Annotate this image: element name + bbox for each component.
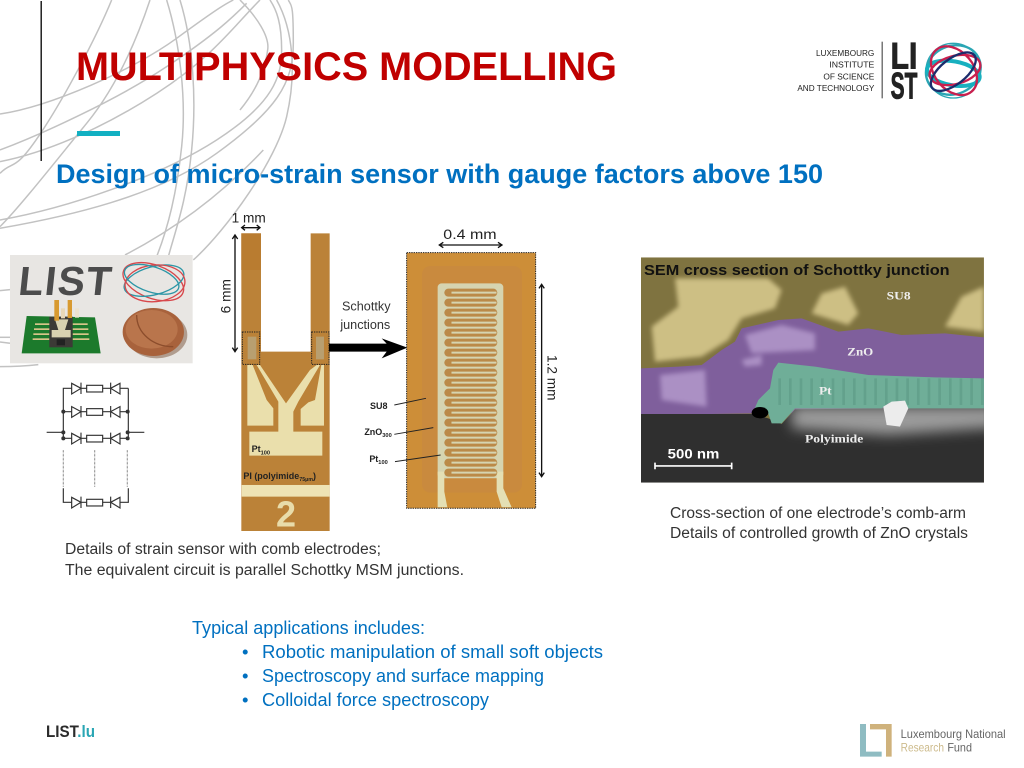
comb labels: 300 [382,433,392,439]
label: Schottky junctions: Schottky [342,299,391,313]
caption: SEM image: Cross-section of one electrode’s comb-arm [670,505,966,522]
left vertical rule [40,1,42,161]
footer logo: Luxembourg National Research Fund: Luxembourg National [901,728,1006,741]
typical applications list: Robotic manipulation of small soft objects [262,641,603,662]
title: MULTIPHYSICS MODELLING [76,45,617,89]
SEM cross section image: 500 nm [668,446,719,462]
footer logo: Luxembourg National Research Fund: Research [901,742,944,755]
SEM cross section image: Pt [819,383,832,397]
logo: Luxembourg Institute of Science and Technology: INSTITUTE [829,60,875,70]
dimension: 1 mm: 1 mm [232,211,266,226]
subtitle: Design of micro-strain sensor with gauge factors above 150 [56,159,823,189]
logo: Luxembourg Institute of Science and Technology: AND TECHNOLOGY [797,83,875,93]
SEM cross section image: SU8 [887,289,911,303]
typical applications list: • [242,641,248,662]
SEM cross section image [641,257,1008,483]
SEM cross section image: SEM cross section of Schottky junction [644,263,950,279]
typical applications list: • [242,665,248,686]
caption: strain sensor: Details of strain sensor with comb electrodes; [65,541,381,558]
dimension: 1.2 mm [539,284,559,477]
comb labels [364,398,441,466]
equivalent circuit diagram [47,383,144,508]
logo: Luxembourg Institute of Science and Technology: LI [891,35,917,77]
logo: Luxembourg Institute of Science and Technology: ST [891,65,917,107]
comb labels: Pt [369,454,378,464]
title accent bar [77,131,120,136]
footer logo: Luxembourg National Research Fund: Fund [947,742,972,755]
label: Schottky junctions: junctions [339,318,390,332]
comb labels: 100 [378,460,388,466]
sensor strip: ) [313,471,316,481]
typical applications list [192,617,603,710]
footer logo: LIST.lu: LIST.lu [46,722,95,741]
sensor strip: 100 [261,450,270,456]
background arcs [0,0,293,367]
sensor strip: 75µm [299,477,313,483]
sensor strip: 2 [276,494,296,535]
dimension: 1.2 mm: 1.2 mm [544,355,559,401]
caption: strain sensor [65,541,464,579]
arrow: Schottky junctions to detail [329,338,407,358]
footer logo: Luxembourg National Research Fund [860,724,1006,757]
logo: Luxembourg Institute of Science and Technology: OF SCIENCE [823,71,875,81]
comb labels: ZnO [364,427,382,437]
dimension: 0.4 mm [439,227,502,248]
typical applications list: Colloidal force spectroscopy [262,689,490,710]
typical applications list: • [242,689,248,710]
photo: sensor on board with coin: LIST [16,258,114,304]
comb labels: SU8 [370,401,387,411]
sensor strip: PI (polyimide [243,471,299,481]
caption: strain sensor: The equivalent circuit is parallel Schottky MSM junctions. [65,562,464,579]
SEM cross section image: ZnO [847,344,873,358]
dimension: 6 mm: 6 mm [219,279,234,313]
caption: SEM image: Details of controlled growth of ZnO crystals [670,525,968,542]
logo: Luxembourg Institute of Science and Technology: LUXEMBOURG [816,48,874,58]
strain sensor micrograph [219,211,559,535]
dimension: 6 mm [219,235,238,352]
caption: SEM image [670,505,968,542]
photo: sensor on board with coin [10,255,193,363]
sensor strip [241,233,330,535]
comb electrode detail [407,253,536,508]
typical applications list: Typical applications includes: [192,617,425,638]
sensor strip: Pt [252,444,261,454]
typical applications list: Spectroscopy and surface mapping [262,665,544,686]
SEM cross section image: Polyimide [805,432,864,446]
logo: Luxembourg Institute of Science and Technology [797,35,989,107]
dimension: 0.4 mm: 0.4 mm [443,227,497,242]
label: Schottky junctions [339,299,391,332]
